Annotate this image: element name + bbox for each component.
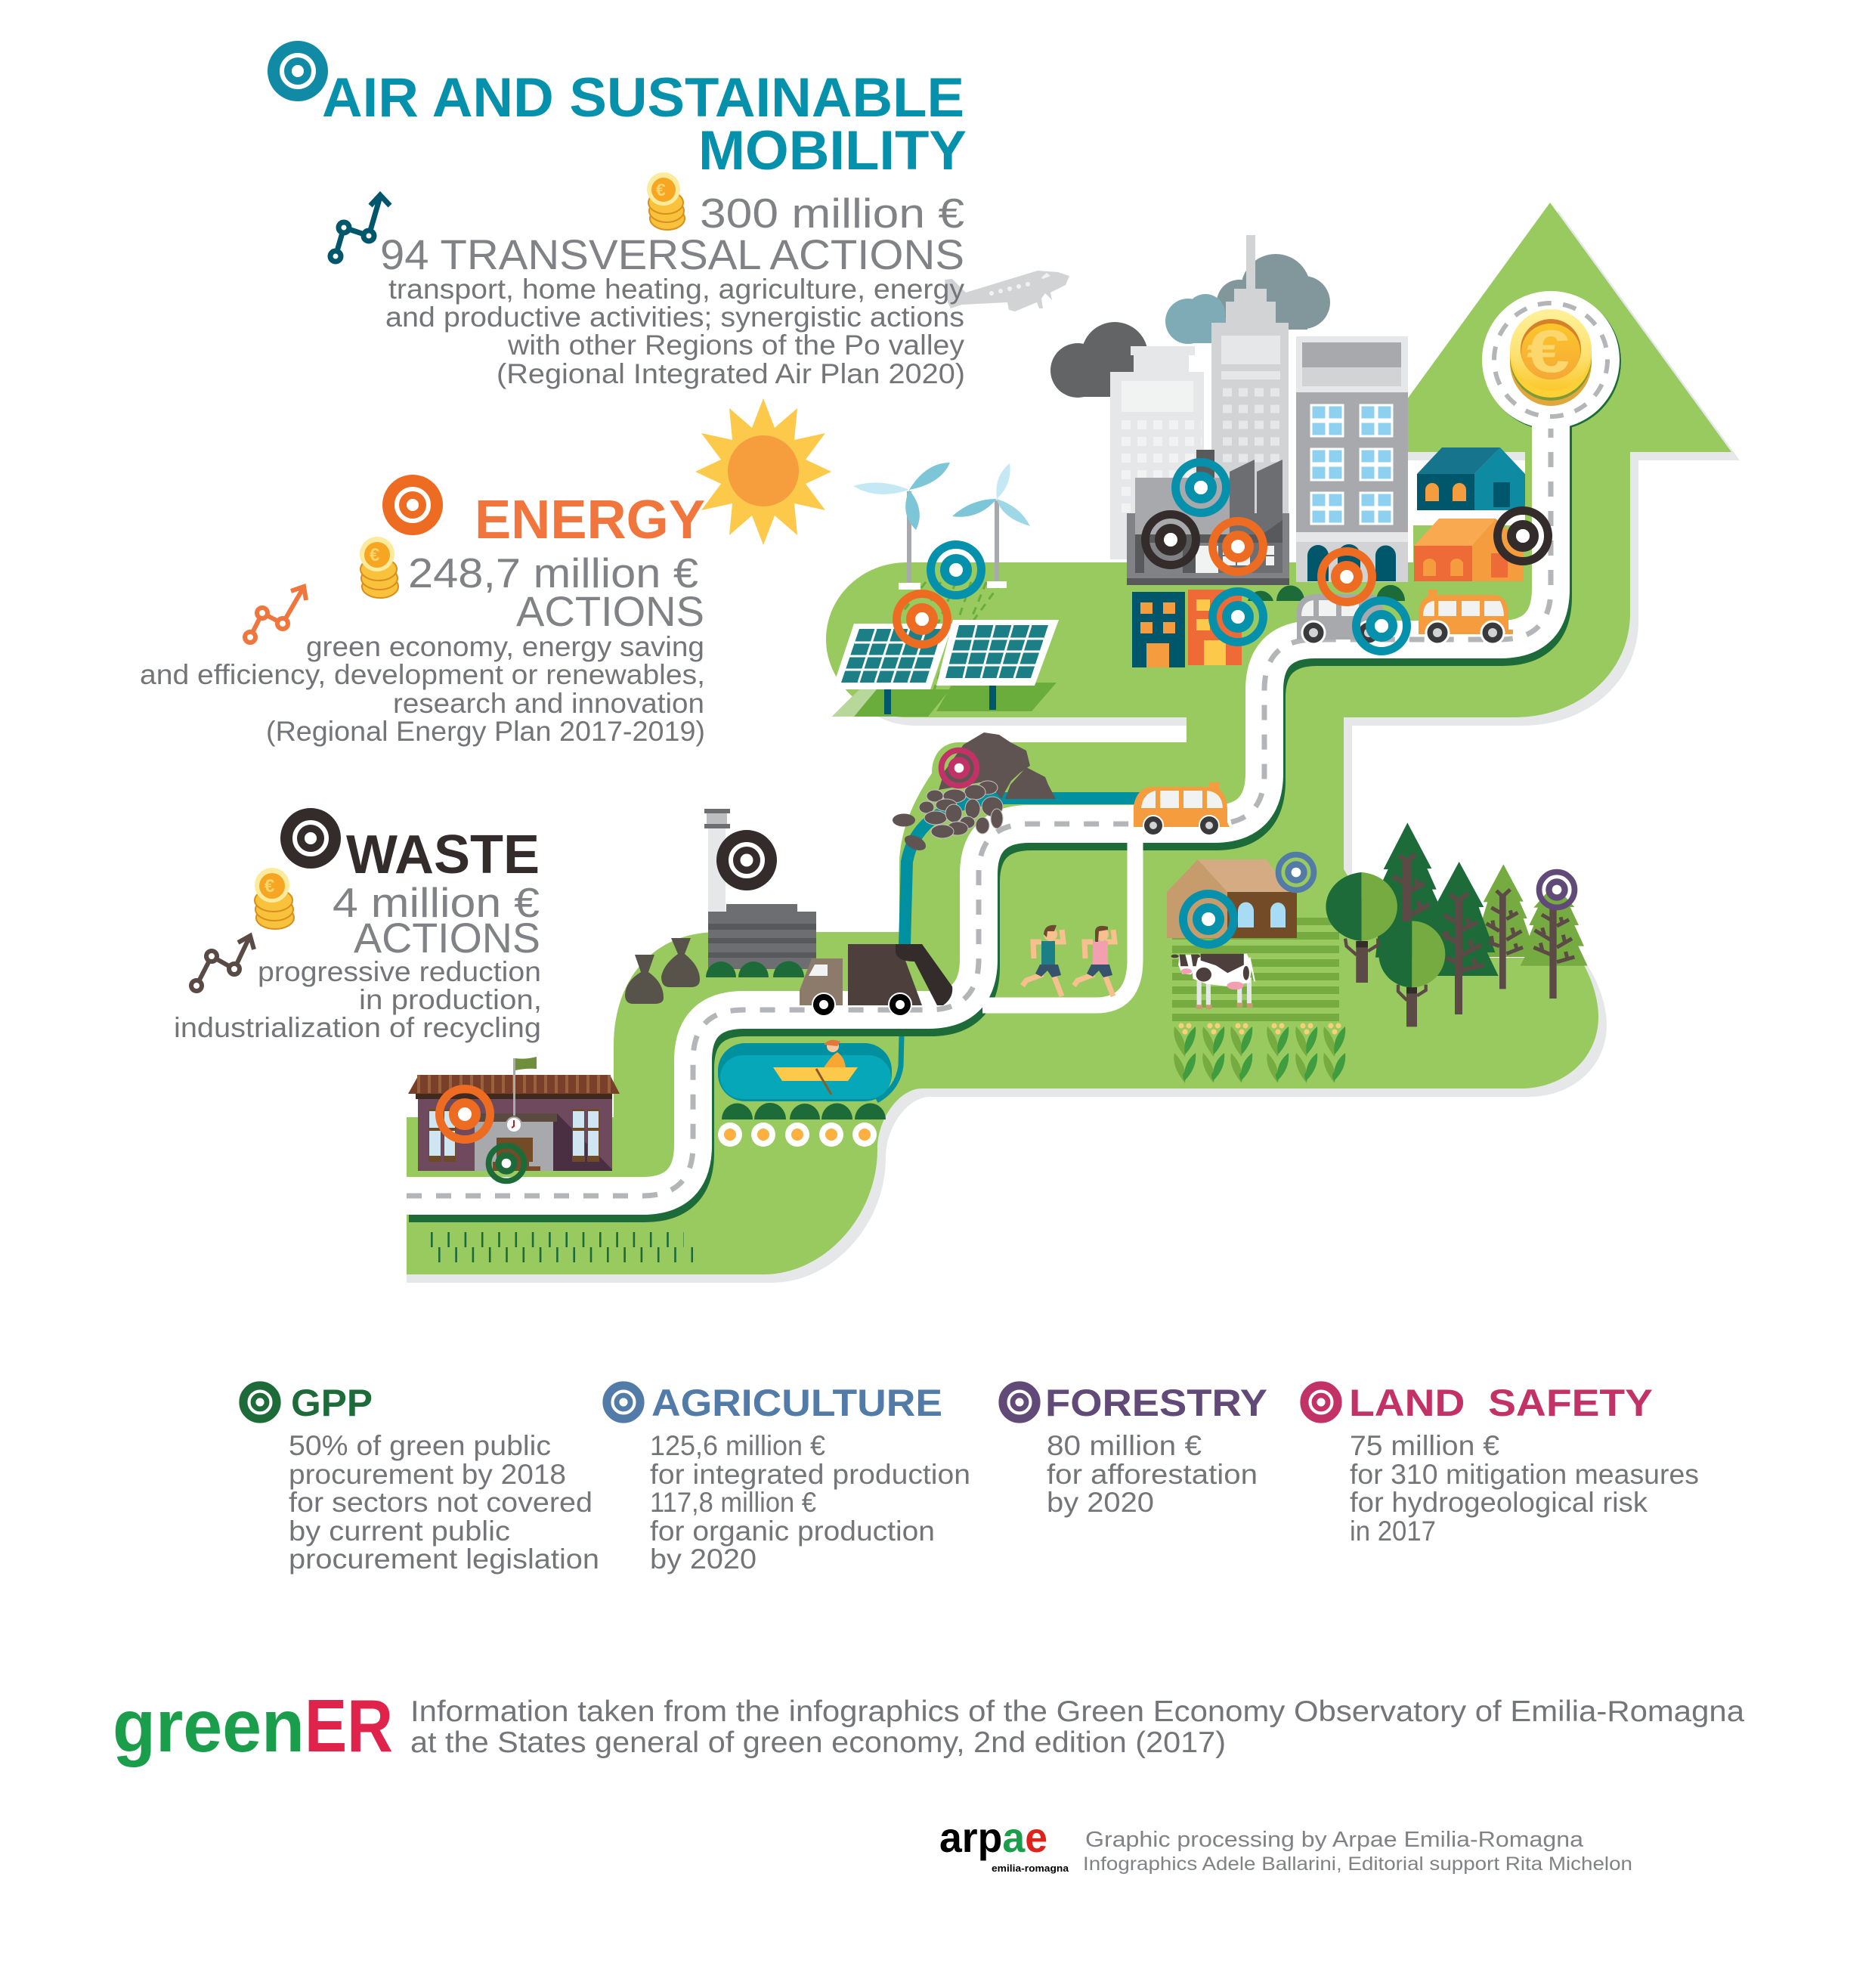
text: agriculture description (650, 1430, 970, 1575)
text: source note: Information taken from the infographics of the Green Economy Observatory of Emilia-Romagna (410, 1695, 1744, 1728)
orange house (1414, 519, 1524, 581)
small orange building (1188, 590, 1242, 665)
text: agriculture description: by 2020 (650, 1544, 756, 1575)
text: waste description: progressive reduction (258, 956, 541, 987)
school roof (408, 1075, 620, 1094)
panel: land safety (1304, 1382, 1699, 1547)
roundabout dashes (1494, 303, 1607, 416)
school building (408, 1057, 620, 1171)
text: 248,7 million: 248,7 million € (408, 550, 698, 596)
text: forestry description: by 2020 (1047, 1487, 1154, 1518)
heading: agriculture: AGRICULTURE (651, 1382, 942, 1424)
icon: coins (255, 868, 294, 929)
heading: air and sustainable mobility: AIR AND SUSTAINABLE (322, 67, 964, 129)
icon: forestry target (1003, 1386, 1036, 1419)
farm (1167, 859, 1345, 1083)
wind farm and solar panels (832, 463, 1059, 717)
cloud: blue-grey large (1217, 254, 1330, 330)
text: air description (385, 274, 965, 389)
pond with rower (718, 1040, 892, 1101)
school windows (429, 1109, 599, 1162)
field stripes (1172, 918, 1339, 1021)
text: 4 million: 4 million € (333, 879, 540, 926)
factory main block (1135, 478, 1230, 538)
coin roundabout (1482, 291, 1620, 429)
target: energy, school (440, 1088, 490, 1140)
text: energy description: (Regional Energy Plan 2017-2019) (266, 716, 705, 747)
target: energy, factory (1212, 522, 1264, 571)
text: agriculture description: for organic production (650, 1516, 935, 1547)
road (407, 408, 1551, 1196)
text: land safety description: in 2017 (1350, 1516, 1436, 1547)
panel: gpp (243, 1382, 599, 1575)
text: source note: at the States general of green economy, 2nd edition (2017) (410, 1726, 1226, 1759)
factory (1127, 450, 1289, 585)
text: agriculture description: for integrated production (650, 1459, 970, 1490)
round tree two (1378, 921, 1445, 1027)
target: waste, house (1498, 511, 1548, 561)
text: air description: and productive activities; synergistic actions (385, 302, 964, 333)
text: actions: ACTIONS (516, 587, 704, 635)
logo: greenER: green (113, 1684, 305, 1767)
blue house (1417, 447, 1525, 510)
target: air, wind (931, 544, 981, 596)
forest (1326, 822, 1588, 1027)
panel: energy (140, 481, 705, 747)
runners (1023, 925, 1115, 996)
waste plant (625, 809, 816, 1004)
corn (1174, 1023, 1345, 1083)
orange bus, lower road (1134, 782, 1230, 835)
illustration: green land arrow with road (407, 203, 1740, 1283)
text: credits: Graphic processing by Arpae Emilia-Romagna (1085, 1828, 1584, 1852)
target: agriculture, barn (1279, 855, 1313, 890)
target: energy, building (1321, 552, 1372, 602)
text: land safety description (1350, 1430, 1699, 1547)
icon: air target (274, 47, 322, 95)
text: land safety description: 75 million € (1350, 1430, 1499, 1461)
cloud: light blue (1165, 294, 1232, 344)
text: waste description: in production, (359, 984, 542, 1015)
grass rows (431, 1240, 693, 1255)
icon: big euro coin (1510, 309, 1592, 406)
text: air description: (Regional Integrated Air Plan 2020) (497, 358, 965, 389)
text: source note (410, 1695, 1744, 1759)
text: gpp description: 50% of green public (289, 1430, 551, 1461)
waste rocks (893, 732, 1056, 853)
heading: air and sustainable mobility (322, 67, 967, 181)
runner one (1023, 925, 1063, 996)
clouds (1050, 254, 1330, 398)
big rock (939, 732, 1030, 799)
heading: gpp: GPP (291, 1382, 373, 1424)
boulders (919, 781, 1003, 838)
text: gpp description: by current public (289, 1516, 510, 1547)
logo: arpae (939, 1813, 1069, 1874)
school walls (418, 1098, 612, 1171)
icon: trend arrow (330, 195, 390, 262)
text: energy description: and efficiency, development or renewables, (140, 659, 705, 690)
land shadow (407, 211, 1740, 1283)
text: air description: with other Regions of the Po valley (507, 330, 965, 361)
daisies (718, 1123, 877, 1147)
river (877, 798, 1143, 1101)
text: land safety description: for hydrogeological risk (1350, 1487, 1648, 1518)
icon: coins: € (370, 545, 379, 565)
text: energy description (140, 631, 705, 747)
text: air description: transport, home heating, agriculture, energy (388, 274, 965, 305)
map target icons (440, 463, 1574, 1181)
cloud: dark (1050, 322, 1156, 398)
factory base (1127, 513, 1289, 578)
text: waste description (174, 956, 542, 1043)
text: forestry description: for afforestation (1047, 1459, 1258, 1490)
solar panel ground shadows (832, 689, 950, 717)
road centre dashes (407, 423, 1551, 1196)
pine trunks (1393, 854, 1574, 1014)
coin roundabout edge (1484, 293, 1621, 430)
icon: trend arrow (191, 936, 254, 991)
icon: land safety target (1304, 1386, 1338, 1419)
heading: land safety: LAND SAFETY (1349, 1382, 1653, 1424)
solar panel left (832, 624, 953, 714)
pine: dark back (1375, 822, 1445, 958)
icon: trend arrow (245, 587, 306, 643)
road branch around the runners (982, 841, 1135, 1005)
building: grey with blue windows (1296, 336, 1408, 582)
target: air, small building (1212, 591, 1264, 643)
tower: light left (1110, 346, 1204, 559)
text: actions: ACTIONS (354, 914, 540, 961)
clock (506, 1117, 521, 1132)
city buildings (1110, 235, 1408, 667)
road edge (409, 416, 1553, 1203)
target: waste, plant (722, 836, 771, 884)
heading: energy: ENERGY (475, 490, 705, 550)
icon: energy target (388, 481, 437, 529)
cow (1171, 954, 1255, 1009)
icon: waste target (286, 814, 335, 862)
round tree one (1326, 872, 1397, 983)
flag (513, 1058, 515, 1116)
panel: waste (174, 814, 542, 1043)
target: energy, solar (896, 594, 948, 644)
icon: coins (647, 172, 685, 230)
heading: air and sustainable mobility: MOBILITY (698, 120, 967, 181)
icon: coins (360, 537, 398, 598)
bushes under the city (1248, 585, 1405, 601)
pond bushes (722, 1103, 886, 1119)
text: credits (1083, 1828, 1632, 1875)
land (407, 203, 1731, 1274)
target: waste, factory (1146, 514, 1196, 565)
text: forestry description: 80 million € (1047, 1430, 1202, 1461)
wind turbine right (952, 463, 1030, 588)
target: air, bus (1356, 600, 1407, 652)
target: land safety, rock (942, 751, 976, 785)
sun (695, 398, 831, 545)
text: credits: Infographics Adele Ballarini, Editorial support Rita Michelon (1083, 1853, 1632, 1875)
panel: air and sustainable mobility (274, 47, 967, 389)
logo: arpae: emilia-romagna (992, 1863, 1069, 1874)
grey bus (1297, 594, 1383, 644)
target: gpp, school (489, 1146, 524, 1181)
icon: coins: € (265, 876, 274, 896)
text: 300 million: 300 million € (700, 190, 964, 237)
pine: light right back (1471, 864, 1536, 957)
solar panel right (936, 620, 1059, 710)
plane (945, 271, 1069, 311)
barn (1167, 859, 1297, 938)
panel: agriculture (607, 1382, 970, 1575)
wind turbine left (853, 463, 950, 590)
runner two (1074, 926, 1115, 996)
text: agriculture description: 125,6 million € (650, 1430, 825, 1461)
panel: forestry (1003, 1382, 1267, 1518)
small dark teal building (1132, 592, 1185, 667)
garbage truck (800, 944, 952, 1016)
icon: coins: € (656, 180, 666, 200)
factory sawtooth walls (1230, 460, 1282, 535)
chimney (708, 828, 726, 915)
text: gpp description: for sectors not covered (289, 1487, 593, 1518)
field dashes (862, 582, 1001, 703)
orange bus, upper road (1419, 590, 1513, 644)
text: gpp description (289, 1430, 599, 1575)
factory chimney (1196, 450, 1214, 480)
text: forestry description (1047, 1430, 1258, 1518)
text: energy description: green economy, energy saving (306, 631, 704, 662)
school entrance (475, 1122, 553, 1171)
text: gpp description: procurement legislation (289, 1544, 599, 1575)
text: waste description: industrialization of recycling (174, 1012, 541, 1043)
text: land safety description: for 310 mitigation measures (1350, 1459, 1699, 1490)
tower: central skyscraper (1211, 235, 1289, 529)
target: forestry, pine (1539, 872, 1574, 907)
heading: waste: WASTE (346, 825, 540, 885)
icon: big euro coin: € (1527, 317, 1570, 385)
icon: agriculture target (607, 1386, 640, 1419)
text: energy description: research and innovation (393, 688, 704, 719)
icon: gpp target (243, 1386, 277, 1419)
target: air, barn (1183, 893, 1233, 945)
bushes (706, 961, 804, 977)
text: gpp description: procurement by 2018 (289, 1459, 566, 1490)
heading: forestry: FORESTRY (1045, 1382, 1267, 1424)
plant building (726, 904, 797, 913)
logo: greenER: ER (305, 1684, 393, 1767)
pine: light right front (1521, 884, 1588, 966)
garbage bags (625, 955, 664, 1004)
target: air, factory (1176, 463, 1226, 512)
pine: dark centre (1421, 862, 1499, 976)
second rock (1005, 767, 1056, 799)
text: 94 transversal actions: 94 TRANSVERSAL ACTIONS (380, 231, 964, 278)
text: agriculture description: 117,8 million € (650, 1487, 816, 1518)
logo: arpae: arpae (939, 1813, 1047, 1861)
